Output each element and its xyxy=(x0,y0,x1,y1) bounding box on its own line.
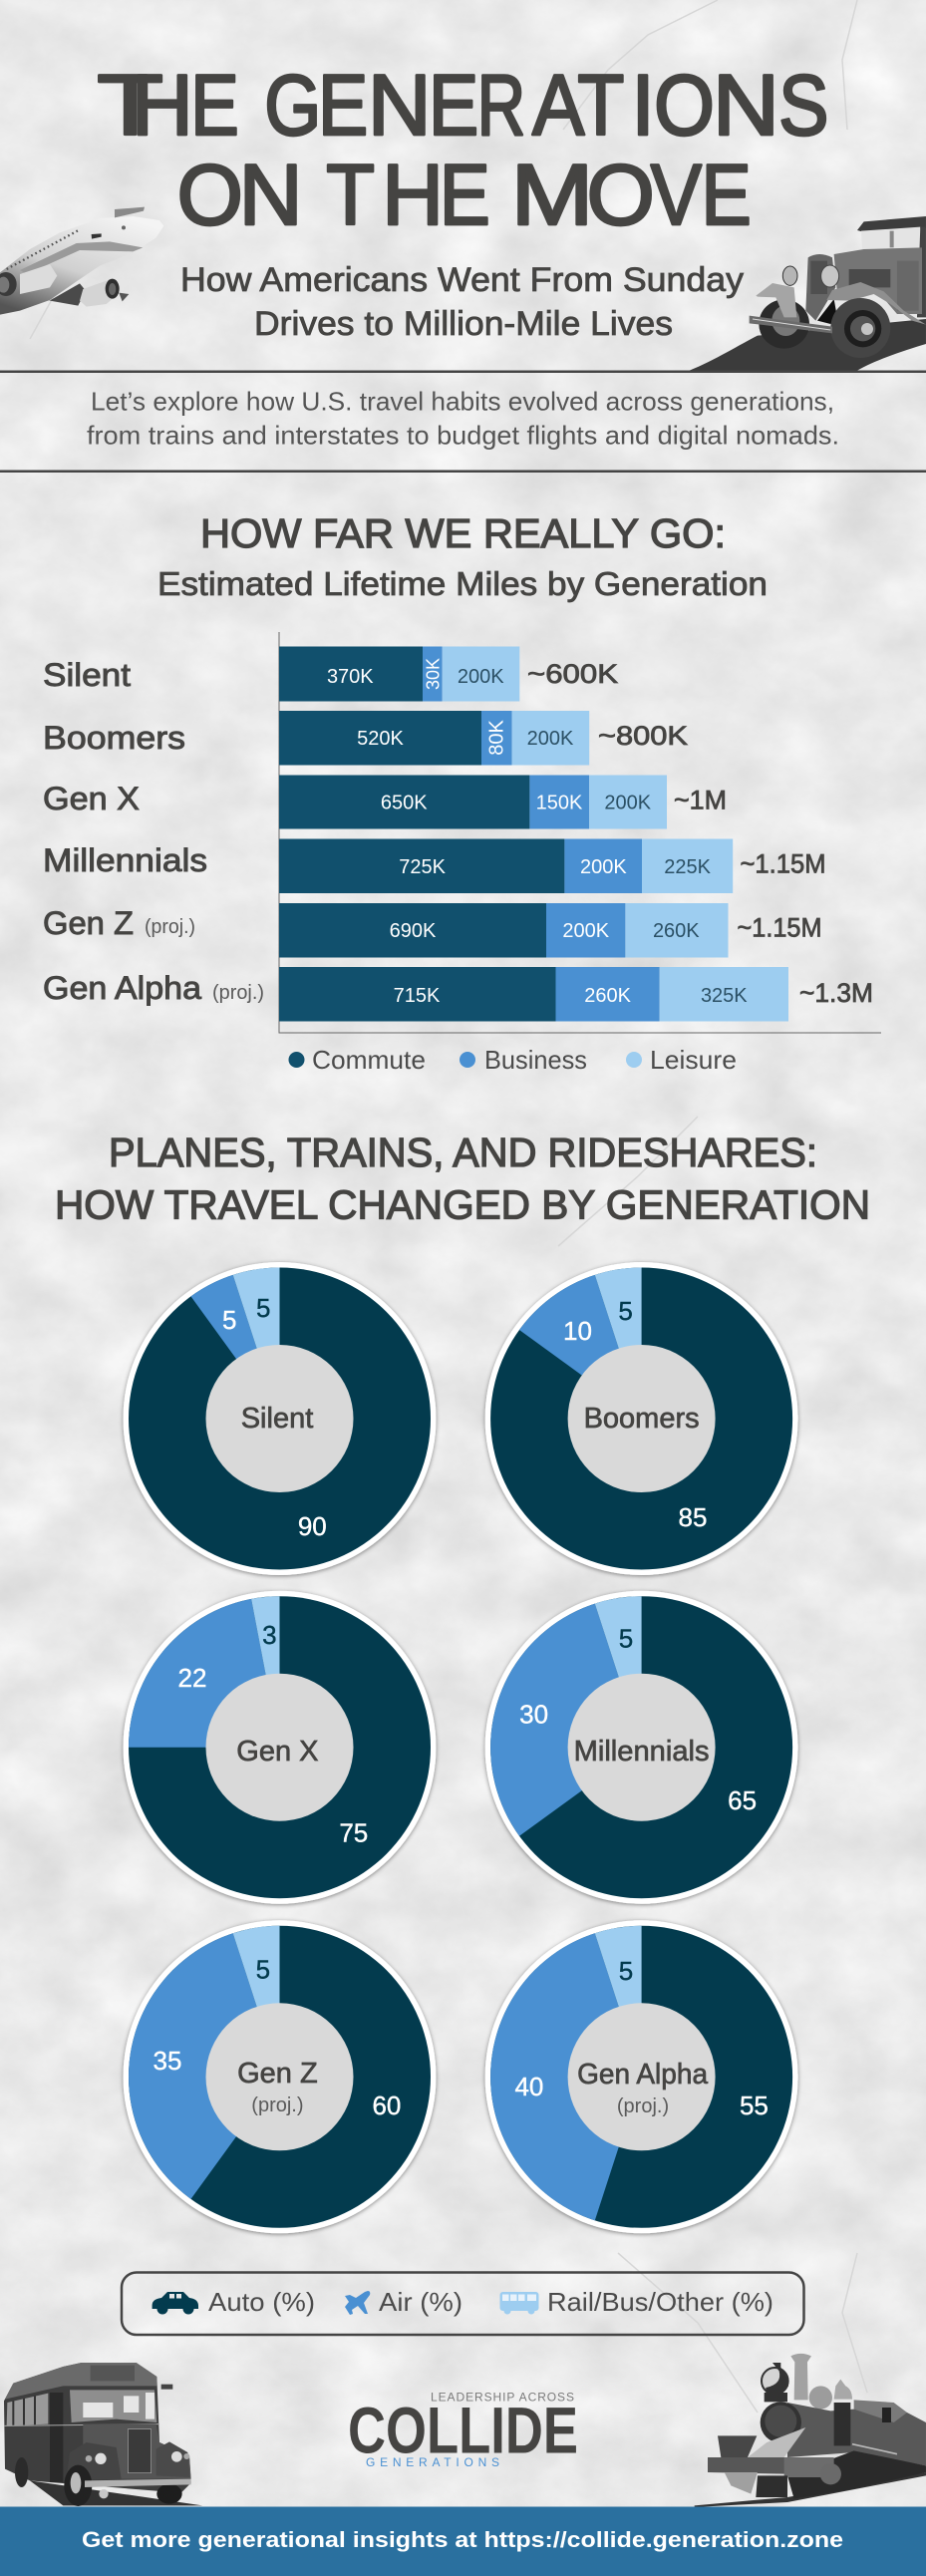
title: O xyxy=(587,148,655,243)
row: Gen Z xyxy=(43,903,821,957)
donut: Gen X: 3 xyxy=(262,1620,277,1650)
donut: Gen Z: Gen Z xyxy=(237,2058,318,2090)
row: Gen Alpha: 260K xyxy=(584,985,632,1007)
title: V xyxy=(651,148,702,243)
heading: planes trains rideshares: HOW TRAVEL CHANGED BY GENERATION xyxy=(55,1182,870,1228)
row: Gen Z: Gen Z xyxy=(43,905,134,941)
bar chart: lifetime miles xyxy=(43,632,881,1033)
row: Silent: Silent xyxy=(43,657,131,693)
title: N xyxy=(713,58,779,154)
intro text: from trains and interstates to budget flights and digital nomads. xyxy=(87,421,839,451)
row: Millennials: ~1.15M xyxy=(740,849,825,879)
title: O xyxy=(654,58,715,154)
donut: Silent xyxy=(124,1262,437,1575)
row: Gen Alpha: 715K xyxy=(394,985,441,1007)
legend box: auto air rail xyxy=(122,2273,803,2335)
row: Boomers: 80K xyxy=(486,720,508,756)
logo: collide generations: COLLIDE xyxy=(348,2393,578,2466)
donut: Gen Alpha: Gen Alpha xyxy=(577,2059,709,2091)
title: O xyxy=(177,148,243,243)
row: Silent xyxy=(43,646,618,702)
title xyxy=(97,58,828,243)
donut: Boomers: 5 xyxy=(618,1296,633,1326)
donut: Gen X: Gen X xyxy=(236,1736,319,1768)
row: Silent: ~600K xyxy=(527,659,618,689)
donut: Silent: 5 xyxy=(256,1293,270,1323)
title: H xyxy=(382,148,444,243)
title: R xyxy=(477,58,525,154)
icon: airplane xyxy=(0,207,163,315)
icon: airplane xyxy=(345,2291,370,2315)
title: N xyxy=(368,58,432,154)
donut: Boomers: Boomers xyxy=(584,1403,700,1435)
donut: Gen Alpha xyxy=(485,1920,798,2233)
logo: collide generations: GENERATIONS xyxy=(366,2455,499,2469)
row: Silent: 370K xyxy=(327,666,374,688)
donut: Gen Z: (proj.) xyxy=(251,2094,304,2116)
heading: planes trains rideshares: PLANES, TRAINS, AND RIDESHARES: xyxy=(109,1129,817,1175)
donut: Gen Z: 60 xyxy=(372,2091,401,2120)
row: Gen X: 150K xyxy=(536,792,583,813)
donut: Gen X: 75 xyxy=(339,1818,368,1848)
row: Boomers: 200K xyxy=(527,728,574,750)
footer banner xyxy=(0,2506,926,2576)
legend: commute business leisure: Leisure xyxy=(650,1045,737,1075)
title: E xyxy=(440,148,490,243)
donut: Silent: Silent xyxy=(241,1403,313,1435)
row: Millennials: 225K xyxy=(664,856,712,878)
donut: Gen X: 22 xyxy=(178,1663,206,1693)
row: Gen Alpha: ~1.3M xyxy=(799,978,873,1008)
heading: planes trains rideshares xyxy=(55,1129,870,1228)
title: I xyxy=(631,58,655,154)
heading: how far we really go: Estimated Lifetime Miles by Generation xyxy=(157,565,768,602)
donut: Gen Z xyxy=(124,1920,437,2233)
title: S xyxy=(778,58,828,154)
title: G xyxy=(264,58,321,154)
subtitle xyxy=(180,261,744,343)
legend: commute business leisure: Commute xyxy=(312,1045,426,1075)
icon: steam locomotive xyxy=(695,2354,926,2507)
donut: Gen Alpha: 55 xyxy=(740,2091,769,2120)
row: Gen Z: 200K xyxy=(562,920,610,942)
subtitle: How Americans Went From Sunday xyxy=(180,261,744,299)
title: H xyxy=(132,58,193,154)
icon: bus xyxy=(500,2292,538,2315)
row: Millennials xyxy=(43,839,825,893)
legend: commute business leisure: Business xyxy=(484,1045,587,1075)
donut: Gen Alpha: 40 xyxy=(514,2072,543,2101)
row: Gen X: 200K xyxy=(604,792,652,813)
title: E xyxy=(318,58,368,154)
row: Gen Alpha: Gen Alpha xyxy=(43,970,201,1006)
donut: Gen Alpha: (proj.) xyxy=(617,2095,669,2117)
title: E xyxy=(429,58,478,154)
divider bottom xyxy=(0,471,926,473)
donut: Silent: 90 xyxy=(298,1511,327,1541)
donut: Boomers: 85 xyxy=(679,1502,707,1532)
title: T xyxy=(577,58,624,154)
donut: Gen Z: 35 xyxy=(154,2046,181,2076)
row: Silent: 200K xyxy=(458,666,504,688)
donut: Millennials: 5 xyxy=(619,1623,633,1653)
row: Boomers xyxy=(43,711,688,766)
title: E xyxy=(702,148,752,243)
legend: commute business leisure xyxy=(289,1045,737,1075)
legend box: auto air rail: Air (%) xyxy=(379,2287,463,2317)
row: Boomers: 520K xyxy=(357,728,405,750)
title: A xyxy=(532,58,585,154)
row: Gen Z: (proj.) xyxy=(145,916,195,938)
legend box: auto air rail: Rail/Bus/Other (%) xyxy=(547,2287,773,2317)
row: Boomers: ~800K xyxy=(598,721,688,751)
donut: Millennials: 65 xyxy=(728,1785,757,1815)
donut: Boomers: 10 xyxy=(563,1316,592,1346)
row: Gen Z: ~1.15M xyxy=(738,913,821,943)
divider top xyxy=(0,371,926,373)
heading: how far we really go: HOW FAR WE REALLY GO: xyxy=(200,510,726,556)
row: Millennials: 725K xyxy=(399,856,447,878)
donut: Boomers xyxy=(485,1262,798,1575)
donut: Millennials: Millennials xyxy=(574,1736,710,1768)
row: Gen Alpha xyxy=(43,967,873,1021)
heading: how far we really go xyxy=(157,510,768,602)
row: Millennials: 200K xyxy=(580,856,627,878)
row: Gen X: 650K xyxy=(381,792,428,813)
intro text xyxy=(87,387,839,451)
legend box: auto air rail: Auto (%) xyxy=(208,2287,315,2317)
row: Gen Z: 690K xyxy=(390,920,437,942)
donut: Gen X xyxy=(124,1591,437,1904)
donut: Gen Alpha: 5 xyxy=(619,1956,633,1986)
logo: collide generations: LEADERSHIP ACROSS xyxy=(431,2391,574,2405)
row: Gen Z: 260K xyxy=(653,920,700,942)
row: Gen X: ~1M xyxy=(674,786,727,815)
row: Boomers: Boomers xyxy=(43,720,185,756)
title: E xyxy=(190,58,239,154)
donut: Gen Z: 5 xyxy=(256,1954,270,1984)
row: Gen Alpha: 325K xyxy=(701,985,748,1007)
donut: Millennials xyxy=(485,1591,798,1904)
row: Gen Alpha: (proj.) xyxy=(212,982,264,1004)
title: T xyxy=(326,148,375,243)
icon: car xyxy=(153,2292,198,2315)
subtitle: Drives to Million-Mile Lives xyxy=(254,305,673,343)
donut: Millennials: 30 xyxy=(519,1699,548,1729)
title: N xyxy=(239,148,303,243)
intro text: Let’s explore how U.S. travel habits evolved across generations, xyxy=(91,387,834,417)
icon: vintage bus xyxy=(4,2363,202,2506)
donut: Silent: 5 xyxy=(222,1305,236,1335)
row: Gen X: Gen X xyxy=(43,781,140,816)
row: Gen X xyxy=(43,776,727,829)
title: M xyxy=(511,148,593,243)
row: Millennials: Millennials xyxy=(43,842,207,878)
row: Silent: 30K xyxy=(423,658,443,690)
title: T xyxy=(97,58,163,154)
footer banner: Get more generational insights at https://collide.generation.zone xyxy=(82,2527,843,2552)
icon: vintage car xyxy=(690,216,926,371)
